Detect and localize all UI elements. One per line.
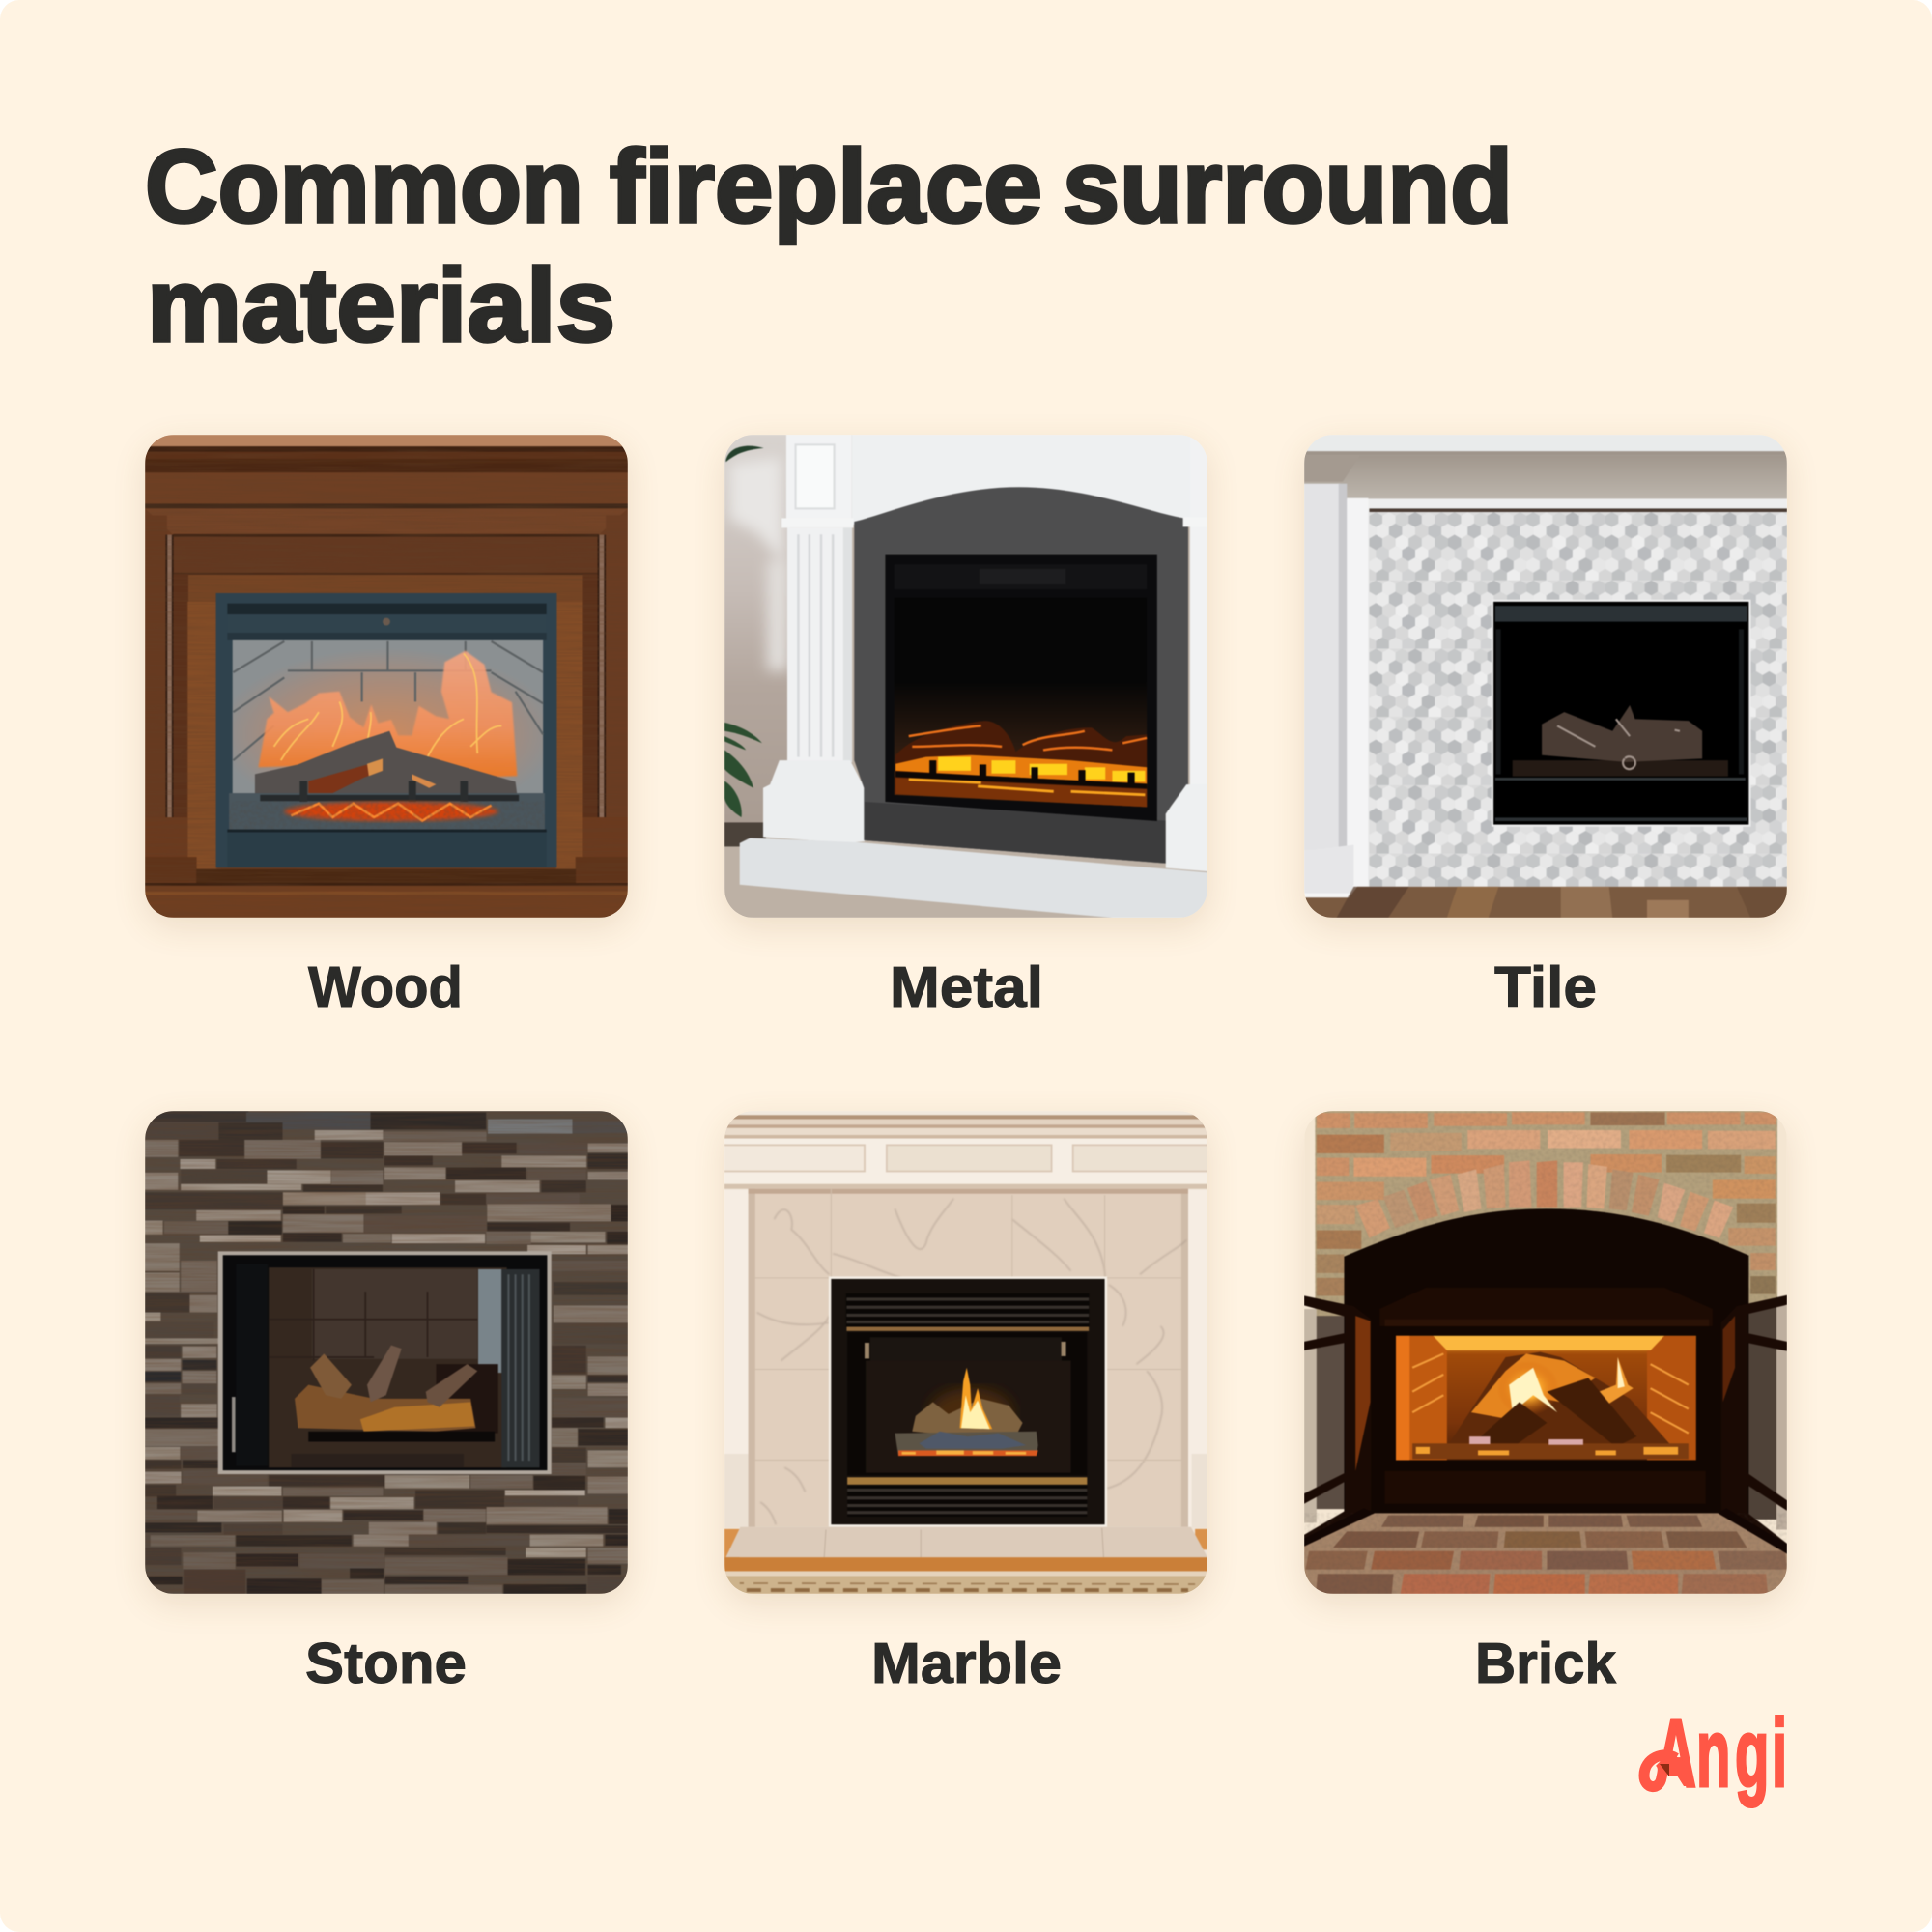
firebox [216, 593, 556, 867]
photo: brick fireplace [1304, 1111, 1787, 1594]
title: materials [147, 246, 615, 363]
photo: stone fireplace [145, 1111, 628, 1594]
title [145, 128, 1513, 363]
label: Tile: Tile [1494, 955, 1597, 1019]
title: surround [1063, 128, 1513, 244]
photo: wood fireplace [145, 435, 628, 918]
label: Brick: Brick [1475, 1632, 1616, 1695]
label: Wood: Wood [308, 955, 463, 1019]
logo: Angi: Angi [1656, 1700, 1787, 1807]
title: fireplace [610, 128, 1042, 244]
photo: marble fireplace [724, 1111, 1208, 1594]
label: Stone: Stone [305, 1632, 467, 1695]
photo: tile fireplace [1304, 435, 1787, 918]
label: Marble: Marble [871, 1632, 1062, 1695]
title: Common [145, 128, 583, 244]
label: Metal: Metal [890, 955, 1043, 1019]
photo: metal fireplace [724, 435, 1208, 918]
